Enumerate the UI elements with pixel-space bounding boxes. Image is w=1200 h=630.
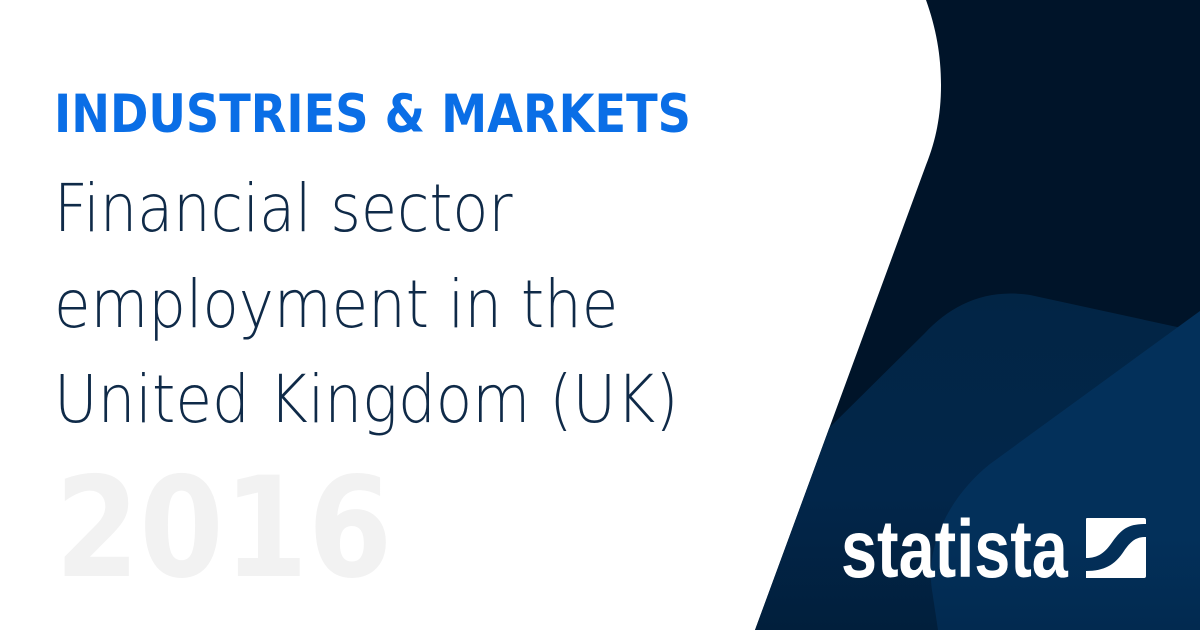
title line 2: employment in the: [54, 266, 618, 343]
heading: category: INDUSTRIES & MARKETS: [54, 84, 691, 145]
title line 3: United Kingdom (UK): [54, 361, 678, 438]
logo wordmark: statista: [841, 504, 1068, 595]
dark background shape with blobs: [755, 0, 1200, 630]
title line 1: Financial sector: [54, 170, 513, 247]
logo icon: [1086, 518, 1146, 578]
year watermark: 2016: [55, 447, 392, 609]
